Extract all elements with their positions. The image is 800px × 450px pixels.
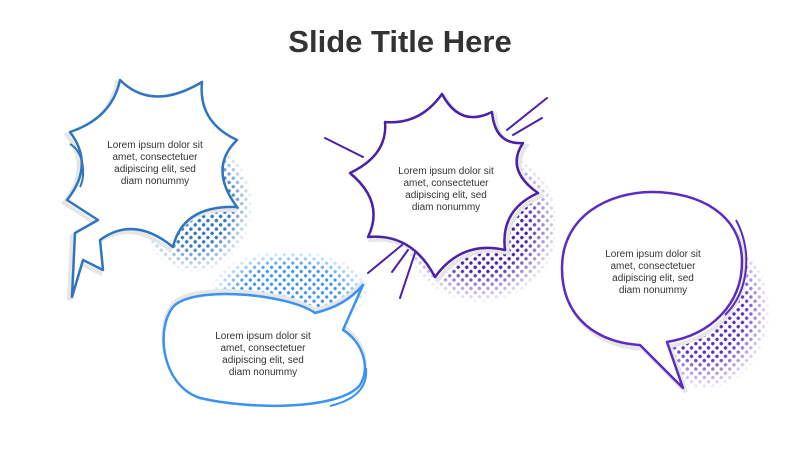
text 1: adipiscing elit, sed: [114, 164, 196, 175]
panel: bubble 3 (purple burst): [325, 94, 555, 305]
title: Slide Title Here: [288, 24, 512, 59]
panel: bubble 1 (blue burst): [64, 80, 260, 300]
text 3: Lorem ipsum dolor sit: [398, 166, 494, 177]
text 1: amet, consectetuer: [112, 152, 198, 163]
text 2: diam nonummy: [229, 367, 297, 378]
text 4: Lorem ipsum dolor sit: [605, 249, 701, 260]
text 2: Lorem ipsum dolor sit: [215, 331, 311, 342]
halftone 2: [212, 250, 368, 314]
text 2: amet, consectetuer: [220, 343, 306, 354]
text 3: amet, consectetuer: [403, 178, 489, 189]
halftone 3: [406, 160, 555, 302]
text 4: adipiscing elit, sed: [612, 273, 694, 284]
panel: bubble 4 (violet speech): [562, 192, 780, 400]
text 4: amet, consectetuer: [610, 261, 696, 272]
halftone 4: [672, 251, 769, 388]
text 1: Lorem ipsum dolor sit: [107, 140, 203, 151]
text 3: diam nonummy: [412, 202, 480, 213]
action lines: [325, 98, 547, 298]
text 2: adipiscing elit, sed: [222, 355, 304, 366]
text 3: adipiscing elit, sed: [405, 190, 487, 201]
panel: bubble 2 (light blue speech): [164, 245, 370, 406]
halftone 1: [147, 155, 252, 272]
text 1: diam nonummy: [121, 176, 189, 187]
text 4: diam nonummy: [619, 285, 687, 296]
